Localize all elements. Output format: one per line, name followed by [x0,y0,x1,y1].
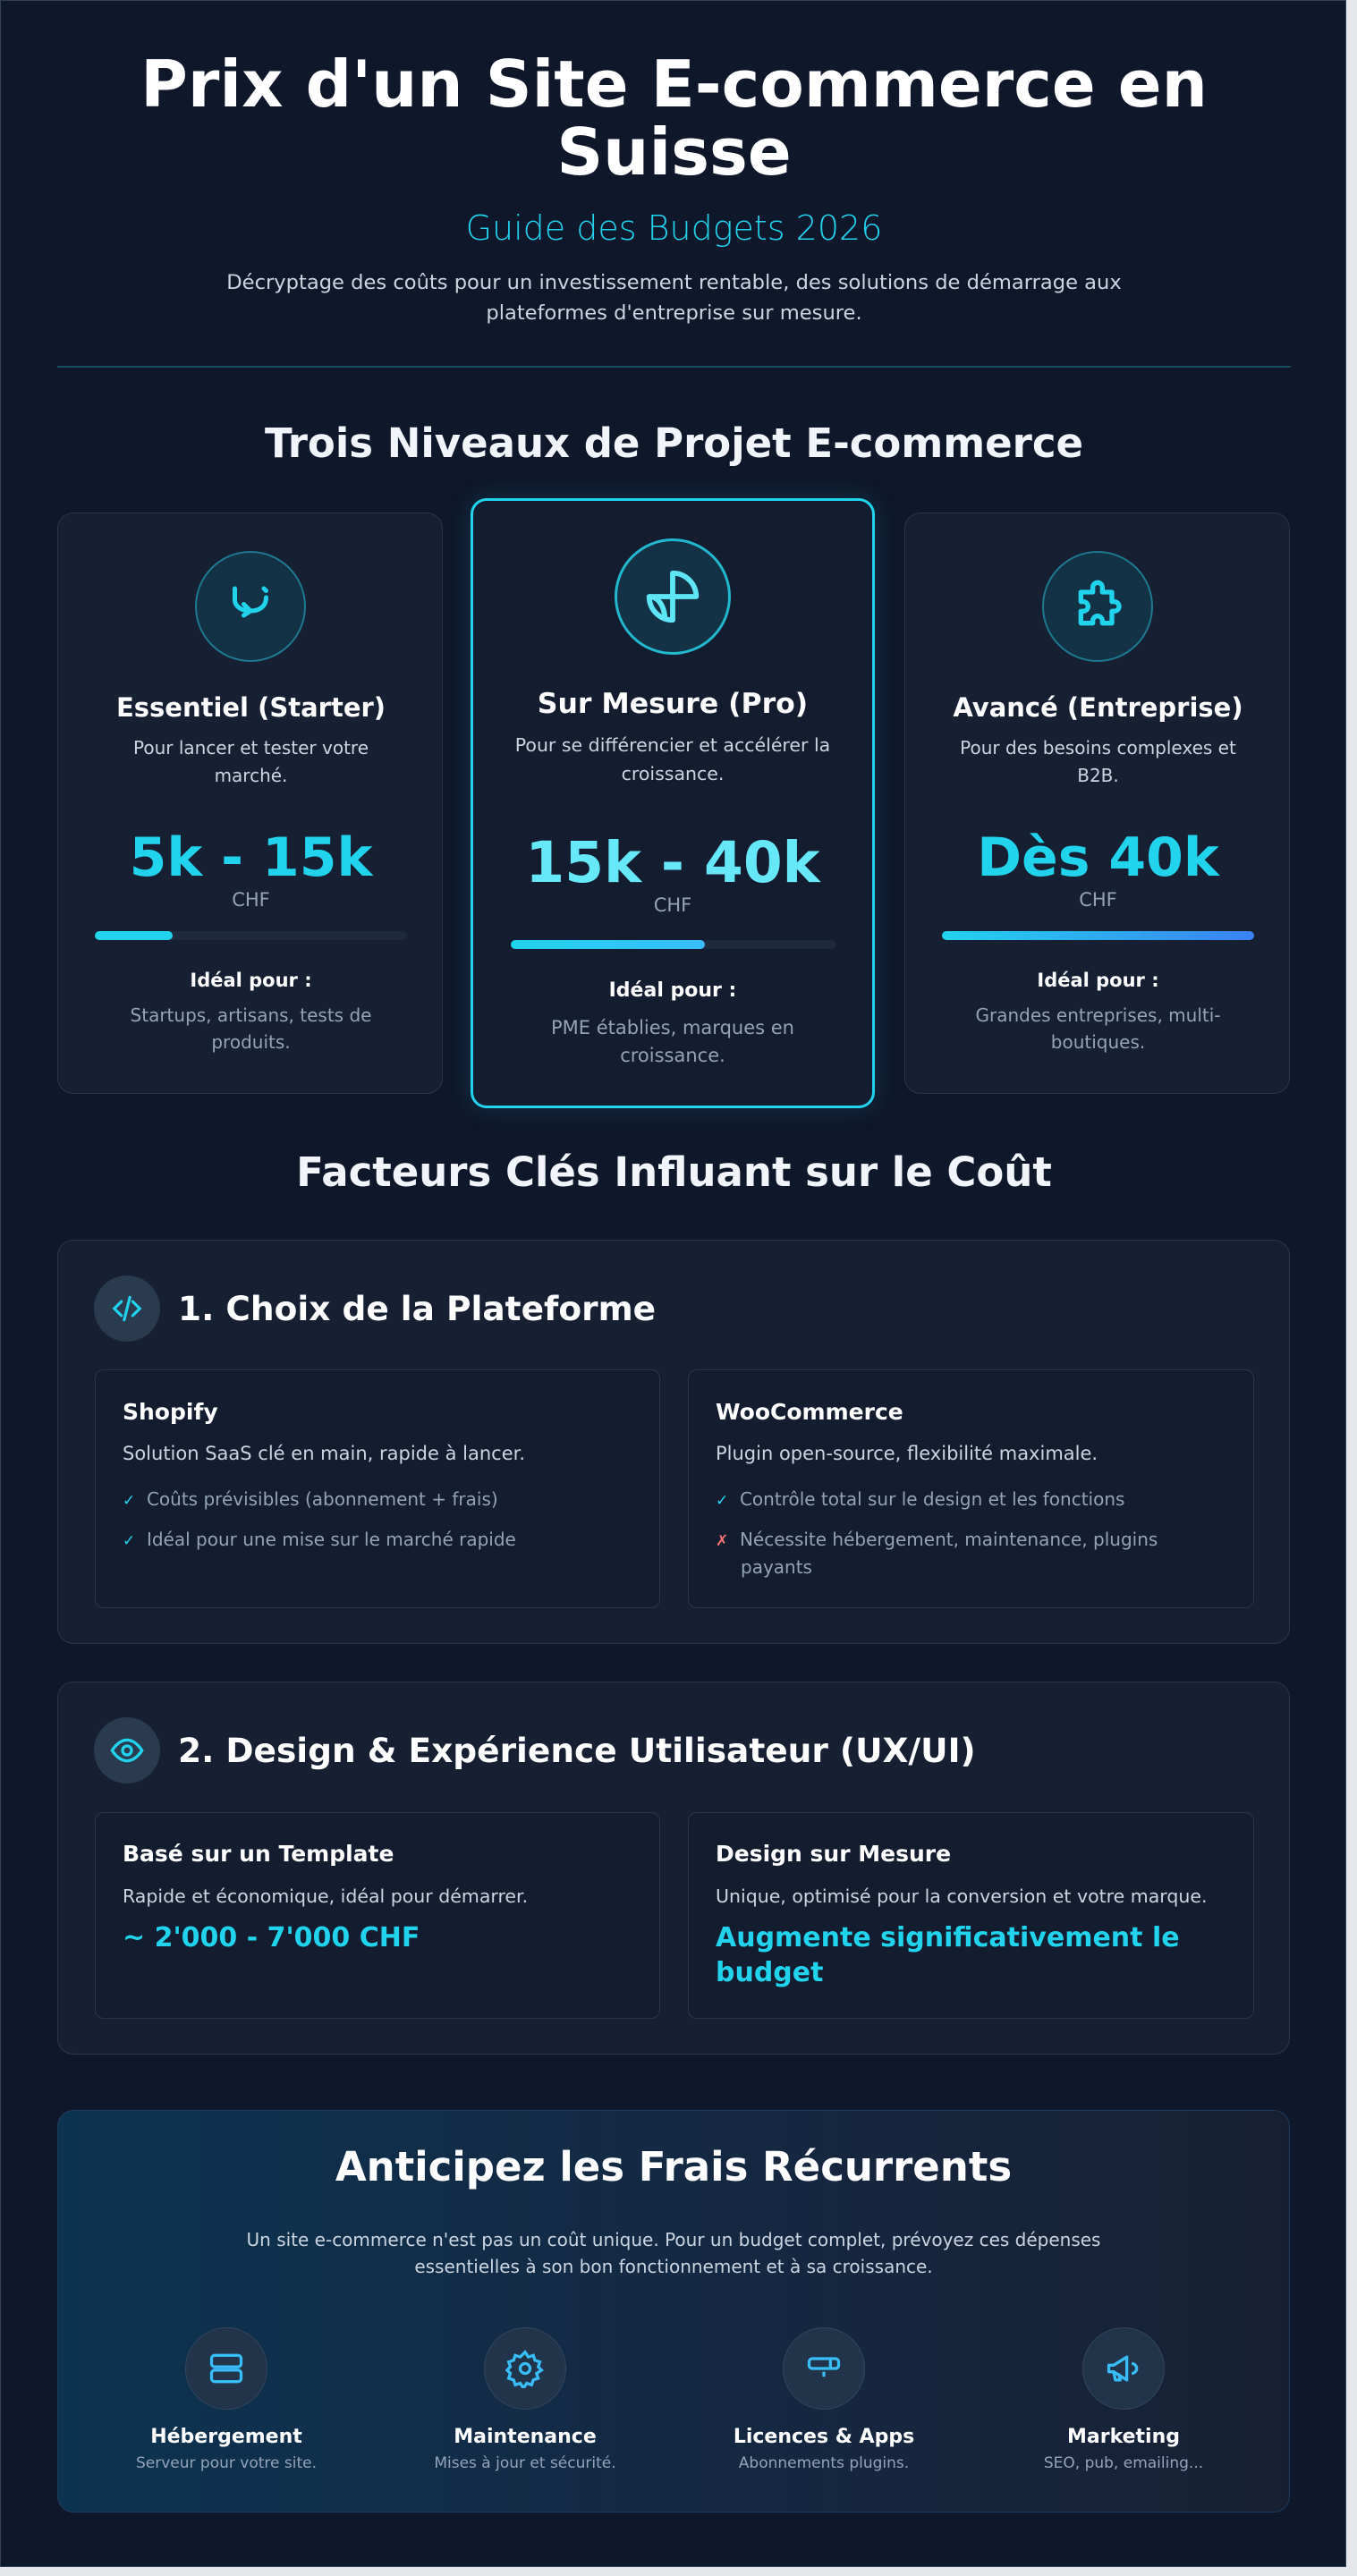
card: entreprise: Avancé (Entreprise) [953,692,1243,723]
card: entreprise: Idéal pour : [1037,970,1159,991]
sub: custom design: Augmente significativement le [716,1922,1180,1953]
card: starter: Idéal pour : [190,970,312,991]
card: entreprise: CHF [1079,889,1117,911]
subtitle: Guide des Budgets 2026 [466,208,882,248]
icon: code [94,1275,160,1342]
panel: recurring costs [57,2110,1290,2512]
icon: puzzle [1042,551,1153,662]
heading: factors: Facteurs Clés Influant sur le Coût [296,1148,1052,1196]
sub: shopify [95,1369,660,1608]
sub: woocommerce: ✗ Nécessite hébergement, maintenance, plugins [716,1529,1158,1550]
heading: tiers: Trois Niveaux de Projet E-commerce [265,419,1083,467]
card: pro (highlighted): Pour se différencier et accélérer la croissance. [515,734,830,784]
item: maintenance [434,2327,616,2472]
item: licences [734,2327,914,2472]
sub: custom design: budget [716,1957,823,1988]
sub: custom design: Design sur Mesure [716,1841,951,1867]
icon: pie chart [615,538,731,655]
sub: template: Basé sur un Template [123,1841,394,1867]
sub: woocommerce: payants [741,1556,812,1578]
item: hosting: Serveur pour votre site. [136,2454,317,2472]
icon: rocket [195,551,306,662]
sub: shopify: ✓ Idéal pour une mise sur le marché rapide [123,1529,516,1550]
card: entreprise: Pour des besoins complexes et B2B. [960,737,1236,786]
card: starter: Essentiel (Starter) [116,692,386,723]
title [140,47,1208,190]
card: pro (highlighted): Sur Mesure (Pro) [538,688,808,720]
item: marketing: SEO, pub, emailing... [1044,2454,1203,2472]
sub: custom design [688,1812,1254,2019]
card: pro (highlighted) [471,498,875,1108]
panel: recurring costs: Anticipez les Frais Récurrents [335,2143,1012,2190]
sub: shopify: ✓ Coûts prévisibles (abonnement + frais) [123,1488,498,1510]
sub: woocommerce: Plugin open-source, flexibilité maximale. [716,1443,1098,1464]
item: licences: Licences & Apps [734,2426,914,2448]
panel: recurring costs: Un site e-commerce n'est pas un coût unique. Pour un budget complet, prévoyez ces dépenses essentielles à son bon fonctionnement et à sa croissance. [247,2229,1100,2277]
title: Suisse [556,114,792,190]
card: entreprise [904,513,1290,1094]
sub: shopify: Shopify [123,1399,218,1425]
title: Prix d'un Site E-commerce en [140,47,1208,122]
item: marketing [1044,2327,1203,2472]
icon: eye [94,1717,160,1784]
sub: woocommerce [688,1369,1254,1608]
card: entreprise: Grandes entreprises, multi-boutiques. [975,1004,1220,1053]
panel: platform: 1. Choix de la Plateforme [178,1289,656,1328]
sub: woocommerce: WooCommerce [716,1399,903,1425]
sub: custom design: Unique, optimisé pour la conversion et votre marque. [716,1885,1208,1907]
sub: woocommerce: ✓ Contrôle total sur le design et les fonctions [716,1488,1124,1510]
card: starter [57,513,443,1094]
intro text: Décryptage des coûts pour un investissement rentable, des solutions de démarrage aux plateformes d'entreprise sur mesure. [226,271,1122,325]
card: pro (highlighted): Idéal pour : [609,979,736,1002]
panel: design: 2. Design & Expérience Utilisateur (UX/UI) [178,1731,976,1770]
item: hosting [136,2327,317,2472]
card: starter: 5k - 15k [130,826,372,889]
card: starter: Startups, artisans, tests de produits. [131,1004,371,1053]
sub: template: ~ 2'000 - 7'000 CHF [123,1922,420,1953]
card: starter: Pour lancer et tester votre marché. [133,737,369,786]
sub: shopify: Solution SaaS clé en main, rapide à lancer. [123,1443,525,1464]
item: marketing: Marketing [1067,2426,1180,2448]
card: pro (highlighted): CHF [654,894,691,916]
item: licences: Abonnements plugins. [739,2454,909,2472]
panel: design [57,1682,1290,2055]
card: pro (highlighted): PME établies, marques en croissance. [551,1017,794,1066]
sub: template: Rapide et économique, idéal pour démarrer. [123,1885,528,1907]
item: maintenance: Mises à jour et sécurité. [434,2454,616,2472]
card: starter: CHF [232,889,270,911]
card: entreprise: Dès 40k [977,826,1219,889]
item: maintenance: Maintenance [454,2426,597,2448]
sub: template [95,1812,660,2019]
item: hosting: Hébergement [150,2426,302,2448]
panel: platform [57,1240,1290,1644]
card: pro (highlighted): 15k - 40k [525,830,820,895]
